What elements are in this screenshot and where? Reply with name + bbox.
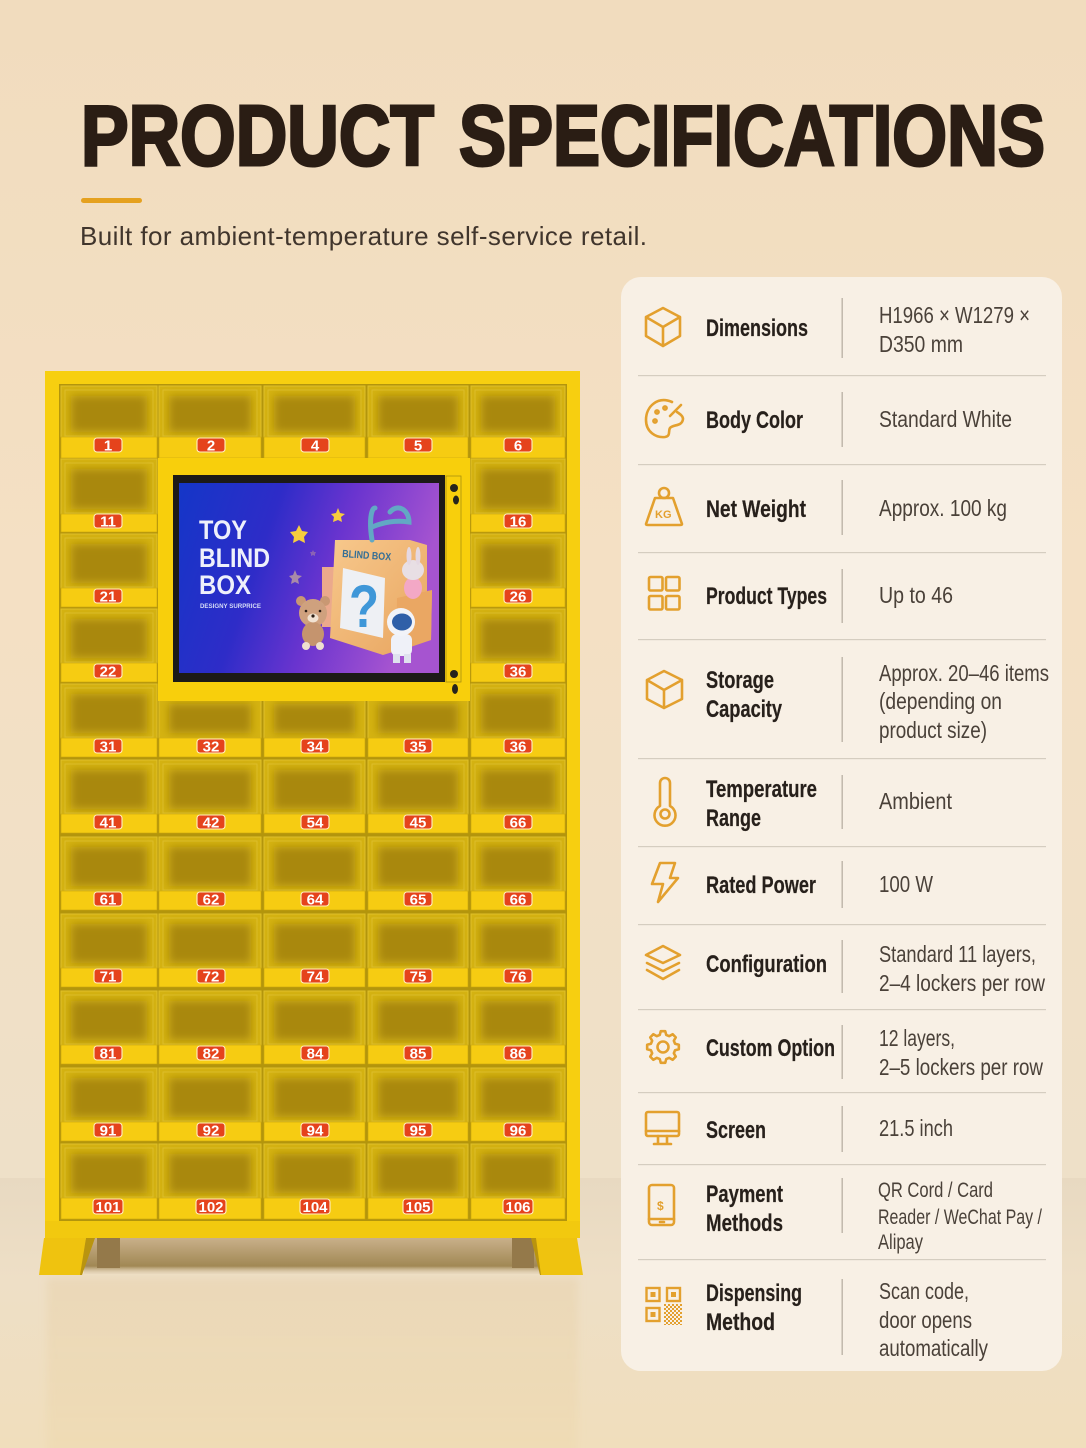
row 7 lockers: 64 <box>307 892 324 908</box>
row 10 lockers: 92 <box>203 1122 219 1140</box>
row: Net Weight: Net Weight <box>706 496 806 523</box>
icon: weight <box>646 488 682 525</box>
icon: lightning bolt <box>652 863 678 902</box>
row: Dimensions: Dimensions <box>706 315 808 342</box>
row 6 lockers: 54 <box>307 814 324 832</box>
title: PRODUCT <box>81 89 434 184</box>
floor shadow under cabinet <box>84 1238 542 1274</box>
row 10 lockers: 95 <box>410 1122 426 1140</box>
row: Storage Capacity: (depending on <box>879 688 1002 714</box>
row: Payment Methods: Payment <box>706 1181 783 1208</box>
icon: cube <box>647 671 682 708</box>
row 10 lockers: 91 <box>100 1122 116 1140</box>
row 7 lockers: 61 <box>100 892 116 908</box>
screen housing <box>158 458 470 701</box>
row 6 lockers: 45 <box>410 814 426 832</box>
row: Dimensions: H1966 × W1279 × <box>879 302 1030 328</box>
locker cabinet <box>39 371 583 1275</box>
row 8 lockers: 76 <box>510 968 526 986</box>
icon: weight: KG <box>655 509 672 521</box>
blind box <box>330 508 432 655</box>
row: Screen: Screen <box>706 1117 766 1144</box>
row 5 lockers: 31 <box>100 738 116 756</box>
row: Custom Option: 12 layers, <box>879 1025 955 1051</box>
row 5 lockers: 36 <box>510 738 526 756</box>
row: Storage Capacity: Approx. 20–46 items <box>879 660 1049 686</box>
rows 2 to 4 side lockers <box>61 459 565 682</box>
icon: layers <box>646 946 680 979</box>
accent bar <box>81 198 142 203</box>
row: Custom Option <box>647 1025 1043 1080</box>
row: Product Types: Up to 46 <box>879 582 953 608</box>
row 8 lockers <box>61 914 565 987</box>
icon: payment phone <box>649 1185 674 1225</box>
row 11 lockers: 102 <box>198 1199 224 1216</box>
row 6 lockers: 66 <box>510 814 526 832</box>
row: Product Types <box>649 577 953 610</box>
row: Body Color <box>646 400 1012 437</box>
row 1 lockers: 5 <box>414 438 422 454</box>
row: Body Color: Body Color <box>706 407 803 434</box>
row 7 lockers <box>61 837 565 910</box>
row 1 lockers <box>61 386 565 458</box>
row 10 lockers <box>61 1068 565 1141</box>
row: Screen: 21.5 inch <box>879 1115 953 1141</box>
row: Dispensing Method: Scan code, <box>879 1278 969 1304</box>
row: Payment Methods: Alipay <box>878 1231 923 1254</box>
row 6 lockers <box>61 760 565 833</box>
row: Rated Power: Rated Power <box>706 872 816 899</box>
row 7 lockers: 65 <box>410 892 426 908</box>
row: Rated Power <box>652 863 933 902</box>
row 10 lockers: 94 <box>307 1122 324 1140</box>
row: Temperature Range: Temperature <box>706 776 817 803</box>
row: Net Weight <box>646 488 1007 525</box>
row 8 lockers: 72 <box>203 968 219 986</box>
screen display <box>179 483 439 673</box>
stars <box>289 508 345 584</box>
row 6 lockers: 41 <box>100 814 116 832</box>
row: Product Types: Product Types <box>706 583 827 610</box>
blind box: ? <box>349 573 379 640</box>
row 6 lockers: 42 <box>203 814 219 832</box>
row 1 lockers: 2 <box>207 438 215 454</box>
icon: payment phone: $ <box>657 1199 664 1213</box>
row: Temperature Range: Range <box>706 805 761 832</box>
row: Temperature Range: Ambient <box>879 788 953 814</box>
row 5 lockers: 35 <box>410 738 426 756</box>
row 11 lockers <box>61 1144 565 1219</box>
floor reflection of the cabinet <box>47 1278 578 1448</box>
floor <box>0 1178 1086 1448</box>
row: Configuration: 2–4 lockers per row <box>879 970 1045 996</box>
row: Dispensing Method <box>646 1278 988 1361</box>
rabbit toy <box>402 547 424 599</box>
row: Configuration <box>646 941 1045 996</box>
row 8 lockers: 71 <box>100 968 116 986</box>
row: Screen <box>646 1112 953 1144</box>
astronaut toy <box>387 608 415 663</box>
row 7 lockers: 62 <box>203 892 219 908</box>
title <box>81 89 1045 184</box>
row: Custom Option: Custom Option <box>706 1035 835 1062</box>
row 1 lockers: 6 <box>514 438 522 454</box>
rows 2 to 4 side lockers: 16 <box>510 514 526 530</box>
row 7 lockers: 66 <box>510 892 526 908</box>
row: Storage Capacity <box>647 660 1049 743</box>
row 9 lockers: 82 <box>203 1046 219 1062</box>
specification panel <box>621 277 1062 1371</box>
row: Body Color: Standard White <box>879 406 1012 432</box>
display headline: DESIGNY SURPRICE <box>200 603 262 610</box>
row 9 lockers: 86 <box>510 1046 526 1062</box>
row: Dispensing Method: Dispensing <box>706 1280 802 1307</box>
row: Payment Methods <box>649 1179 1042 1254</box>
row: Dimensions <box>646 302 1030 357</box>
row 1 lockers: 4 <box>311 438 320 454</box>
icon: palette <box>646 400 683 437</box>
row: Dispensing Method: door opens <box>879 1307 972 1333</box>
icon: cube <box>646 308 680 346</box>
row: Dimensions: D350 mm <box>879 331 963 357</box>
row: Storage Capacity: product size) <box>879 717 987 743</box>
display headline: TOY <box>199 515 247 545</box>
rows 2 to 4 side lockers: 11 <box>100 514 116 530</box>
row: Dispensing Method: automatically <box>879 1335 988 1361</box>
row 9 lockers: 85 <box>410 1046 426 1062</box>
bear toy <box>296 596 330 650</box>
icon: thermometer <box>654 778 676 826</box>
rows 2 to 4 side lockers: 22 <box>100 664 116 680</box>
display headline: BLIND <box>199 543 270 573</box>
rows 2 to 4 side lockers: 36 <box>510 664 526 680</box>
row 1 lockers: 1 <box>104 438 112 454</box>
row 11 lockers: 104 <box>302 1199 328 1216</box>
row: Storage Capacity: Capacity <box>706 696 782 723</box>
row: Storage Capacity: Storage <box>706 667 774 694</box>
row 11 lockers: 106 <box>505 1199 531 1216</box>
display headline <box>199 515 270 610</box>
display headline: BOX <box>199 570 251 600</box>
row 9 lockers: 81 <box>100 1046 116 1062</box>
front legs <box>39 1238 583 1275</box>
rows 2 to 4 side lockers: 26 <box>510 588 526 606</box>
row: Payment Methods: Methods <box>706 1210 783 1237</box>
row: Configuration: Standard 11 layers, <box>879 941 1036 967</box>
row 10 lockers: 96 <box>510 1122 526 1140</box>
row: Payment Methods: QR Cord / Card <box>878 1179 993 1202</box>
row 8 lockers: 74 <box>307 968 324 986</box>
blind box: BLIND BOX <box>342 548 392 563</box>
row 8 lockers: 75 <box>410 968 426 986</box>
row: Custom Option: 2–5 lockers per row <box>879 1054 1043 1080</box>
icon: QR code <box>646 1288 682 1325</box>
cabinet frame <box>45 371 580 1238</box>
row: Dispensing Method: Method <box>706 1309 775 1336</box>
row: Temperature Range <box>654 776 953 832</box>
rows 2 to 4 side lockers: 21 <box>100 588 116 606</box>
icon: monitor <box>646 1112 679 1144</box>
rear legs <box>97 1238 534 1268</box>
row 5 lockers <box>61 684 565 757</box>
row 11 lockers: 101 <box>95 1199 121 1216</box>
row 9 lockers <box>61 991 565 1064</box>
row 5 lockers: 32 <box>203 738 219 756</box>
row 5 lockers: 34 <box>307 738 324 756</box>
row 9 lockers: 84 <box>307 1046 324 1062</box>
icon: grid <box>649 577 680 610</box>
small back box <box>322 567 344 627</box>
row: Net Weight: Approx. 100 kg <box>879 495 1007 521</box>
row: Configuration: Configuration <box>706 951 827 978</box>
subtitle: Built for ambient-temperature self-service retail. <box>80 221 647 251</box>
row: Rated Power: 100 W <box>879 871 933 897</box>
icon: gear <box>647 1031 679 1063</box>
row 11 lockers: 105 <box>405 1199 431 1216</box>
